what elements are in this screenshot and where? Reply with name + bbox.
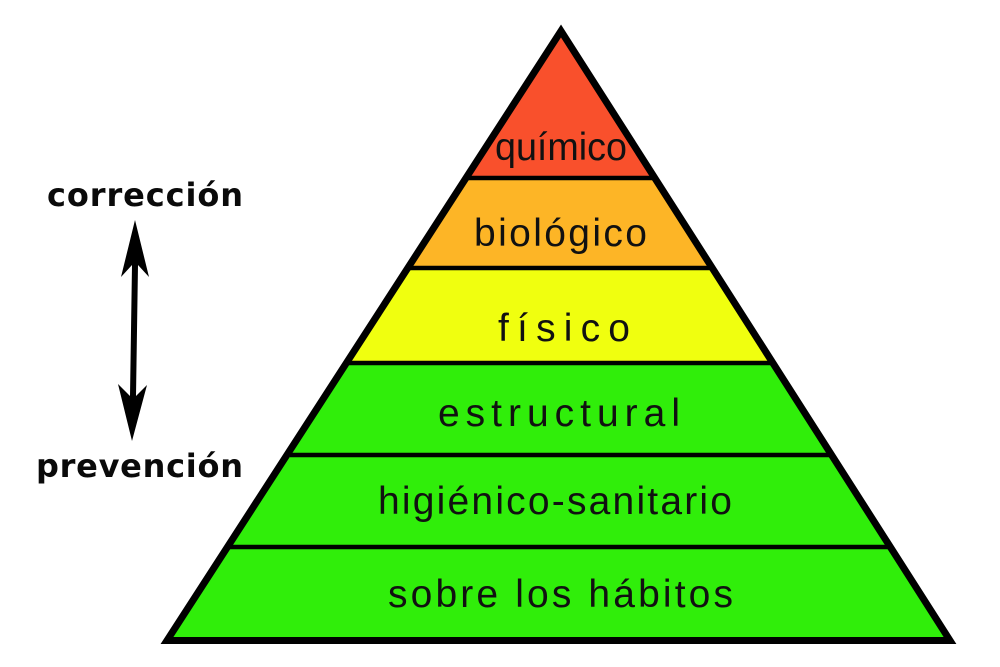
band: biológico <box>410 178 713 268</box>
label: higiénico-sanitario: higiénico-sanitario <box>378 480 732 523</box>
band: físico <box>349 268 772 363</box>
band: estructural <box>290 363 832 455</box>
pyramid dividers and outline <box>167 31 950 640</box>
label: prevención: prevención <box>36 447 243 485</box>
arrow: corrección to prevención <box>118 220 149 441</box>
label: corrección: corrección <box>47 176 243 214</box>
label: químico: químico <box>495 126 627 169</box>
label: estructural: estructural <box>438 392 680 435</box>
pyramid <box>167 26 950 640</box>
band: químico <box>467 26 655 178</box>
band: higiénico-sanitario <box>230 455 891 547</box>
label: físico: físico <box>498 307 630 350</box>
band: sobre los hábitos <box>168 547 949 640</box>
label: biológico: biológico <box>474 212 647 255</box>
label: sobre los hábitos: sobre los hábitos <box>388 573 733 616</box>
